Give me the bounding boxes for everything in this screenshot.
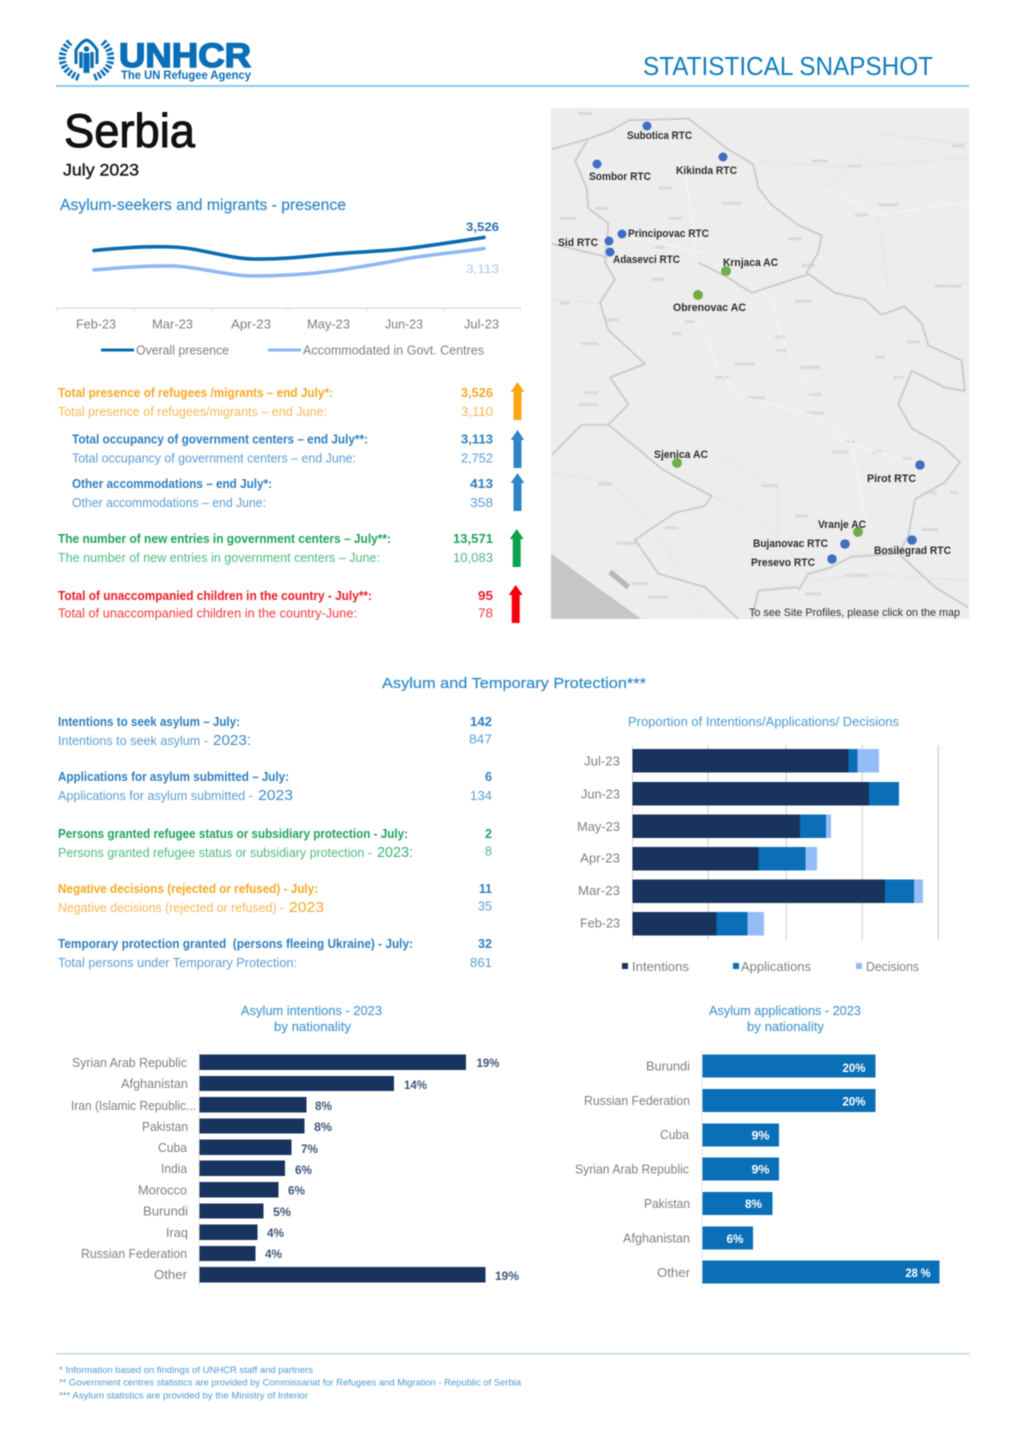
map note: To see Site Profiles, please click on the map xyxy=(749,607,960,619)
category labels: Other xyxy=(154,1268,187,1282)
value labels: 8% xyxy=(314,1120,332,1134)
category labels: Jul-23 xyxy=(584,754,620,768)
axis labels: Jul-23 xyxy=(464,318,499,332)
footnotes xyxy=(59,1365,521,1400)
stats: negative decisions: 11 xyxy=(479,882,492,896)
arrow: red up xyxy=(509,585,523,623)
axis labels: May-23 xyxy=(307,318,350,332)
heading: presence chart: Asylum-seekers and migrants - presence xyxy=(60,197,346,214)
category labels: Iran (Islamic Republic... xyxy=(71,1099,196,1113)
chart title xyxy=(709,1004,861,1034)
stats: intentions: 2023: xyxy=(213,733,251,749)
map labels: Adasevci RTC xyxy=(613,254,680,266)
logo wordmark: UNHCR xyxy=(119,37,251,75)
map labels: Bujanovac RTC xyxy=(753,538,828,550)
chart legend: Accommodated in Govt. Centres xyxy=(303,344,484,358)
stats: government centres: Total occupancy of government centers – end June: xyxy=(72,452,356,466)
stats: unaccompanied children: 95 xyxy=(478,589,493,603)
stats: persons granted protection: Persons granted refugee status or subsidiary protection - xyxy=(58,846,372,860)
bars xyxy=(702,1054,940,1284)
stacked bar chart: proportion of intentions, applications, decisions xyxy=(577,715,939,974)
value labels: 4% xyxy=(265,1247,282,1261)
map pin: Adasevci xyxy=(606,248,614,256)
category labels: India xyxy=(161,1162,187,1176)
value labels: 20% xyxy=(842,1061,866,1075)
map pin: Pirot xyxy=(915,460,925,470)
map labels: Pirot RTC xyxy=(867,473,916,485)
category labels: Iraq xyxy=(166,1226,188,1240)
bars xyxy=(200,1054,486,1282)
map labels: Presevo RTC xyxy=(751,557,815,569)
map pin: Krnjaca xyxy=(721,266,731,276)
value labels: 8% xyxy=(745,1197,762,1211)
stats: unaccompanied children: 78 xyxy=(478,606,493,620)
value labels xyxy=(265,1056,519,1283)
heading: statistical snapshot: STATISTICAL SNAPSHOT xyxy=(643,51,933,81)
stats: other accommodations: Other accommodations – end July*: xyxy=(72,477,272,491)
category labels: Cuba xyxy=(660,1128,689,1142)
value labels: 19% xyxy=(476,1056,500,1070)
map pin: Presevo xyxy=(827,554,837,564)
stats: new entries: The number of new entries in government centers – June: xyxy=(58,551,380,565)
map pin: Kikinda xyxy=(718,152,728,162)
icon: UNHCR emblem xyxy=(62,40,111,78)
heading: asylum and temporary protection: Asylum and Temporary Protection*** xyxy=(382,675,646,692)
stats: persons granted protection xyxy=(58,827,492,861)
stats: intentions: 142 xyxy=(470,715,492,729)
stats: persons granted protection: 8 xyxy=(485,844,492,858)
subtitle: date: July 2023 xyxy=(63,160,139,180)
arrow: blue up xyxy=(511,430,524,468)
bars: Jul-23 xyxy=(632,749,879,772)
stats: government centres: Total occupancy of government centers – end July**: xyxy=(72,432,368,446)
chart title: Proportion of Intentions/Applications/ Decisions xyxy=(628,715,899,729)
stats: intentions: Intentions to seek asylum - xyxy=(58,734,208,748)
category labels: Afghanistan xyxy=(623,1232,690,1246)
map pin: Sid xyxy=(604,236,614,246)
chart title xyxy=(241,1004,382,1034)
logo tagline: The UN Refugee Agency xyxy=(121,70,252,82)
map pin: Subotica xyxy=(642,122,652,130)
category labels: Cuba xyxy=(158,1141,187,1155)
category labels: Mar-23 xyxy=(578,884,620,898)
stats: new entries xyxy=(58,532,493,565)
stats: total presence: Total presence of refugees /migrants – end July*: xyxy=(58,386,333,400)
arrow: blue up xyxy=(511,473,524,511)
stats: persons granted protection: Persons granted refugee status or subsidiary protection - July: xyxy=(58,827,408,841)
stats: other accommodations xyxy=(72,477,493,510)
stats: applications: 2023 xyxy=(258,788,293,804)
map pin: Obrenovac xyxy=(693,290,703,300)
footnotes: ** Government centres statistics are provided by Commissariat for Refugees and Migration - Republic of Serbia xyxy=(59,1378,521,1388)
map labels: Subotica RTC xyxy=(627,130,692,142)
chart legend xyxy=(622,960,919,974)
stats: negative decisions: 35 xyxy=(478,900,492,914)
bar chart: asylum intentions by nationality xyxy=(71,1004,519,1287)
category labels: Burundi xyxy=(143,1204,188,1218)
map pin: Sombor xyxy=(592,160,602,168)
map labels: Sombor RTC xyxy=(589,171,651,183)
category labels: Russian Federation xyxy=(584,1094,690,1108)
data label: accommodated: 3,113 xyxy=(466,262,499,276)
stats: applications: Applications for asylum submitted – July: xyxy=(58,770,289,784)
axis labels: Feb-23 xyxy=(76,318,116,332)
stats: total presence: 3,110 xyxy=(461,405,493,419)
chart title: Asylum intentions - 2023 xyxy=(241,1004,382,1018)
data label: overall: 3,526 xyxy=(466,220,499,234)
stats: other accommodations: Other accommodations – end June: xyxy=(72,496,266,510)
category labels: May-23 xyxy=(577,820,620,834)
bars: May-23 xyxy=(632,814,831,838)
value labels: 6% xyxy=(295,1163,312,1177)
arrow: orange up xyxy=(511,382,524,420)
stats: persons granted protection: 2 xyxy=(485,827,492,841)
stats: government centres: 3,113 xyxy=(461,432,493,446)
value labels: 5% xyxy=(273,1205,291,1219)
category labels: Morocco xyxy=(138,1184,187,1198)
stats: temporary protection xyxy=(58,937,492,970)
stats: negative decisions: Negative decisions (rejected or refused) - xyxy=(58,901,284,915)
category labels xyxy=(577,754,620,930)
category labels: Apr-23 xyxy=(580,852,620,866)
stats: government centres: 2,752 xyxy=(461,452,493,466)
value labels: 9% xyxy=(752,1128,770,1142)
bars: Feb-23 xyxy=(632,912,764,936)
stats: applications: 134 xyxy=(470,789,492,803)
value labels: 20% xyxy=(842,1094,866,1108)
value labels: 4% xyxy=(267,1226,284,1240)
chart legend: Applications xyxy=(741,960,811,974)
chart title: Asylum applications - 2023 xyxy=(709,1004,861,1018)
stats: total presence xyxy=(58,386,493,419)
map pin: Bosilegrad xyxy=(907,535,917,545)
category labels xyxy=(575,1060,690,1280)
map labels: Obrenovac AC xyxy=(673,302,746,314)
stats: negative decisions: 2023 xyxy=(289,900,324,916)
value labels: 28 % xyxy=(906,1266,931,1280)
map labels: Vranje AC xyxy=(818,519,866,531)
stats: other accommodations: 413 xyxy=(470,477,493,491)
chart legend: Decisions xyxy=(866,960,919,974)
map labels: Kikinda RTC xyxy=(676,165,737,177)
category labels: Afghanistan xyxy=(121,1077,188,1091)
title: Serbia: Serbia xyxy=(64,104,196,157)
category labels: Other xyxy=(657,1266,690,1280)
value labels: 6% xyxy=(288,1184,305,1198)
stats: negative decisions xyxy=(58,882,492,916)
category labels: Jun-23 xyxy=(581,788,620,802)
stats: applications: Applications for asylum submitted - xyxy=(58,789,253,803)
line: accommodated xyxy=(94,248,484,276)
stats: unaccompanied children xyxy=(58,589,493,620)
stats: temporary protection: 32 xyxy=(478,937,492,951)
map labels: Principovac RTC xyxy=(628,228,709,240)
map pin: Sjenica xyxy=(672,458,682,468)
axis labels: Apr-23 xyxy=(231,318,271,332)
axis labels: Mar-23 xyxy=(152,318,193,332)
value labels: 19% xyxy=(495,1269,519,1283)
stats: intentions: Intentions to seek asylum – July: xyxy=(58,715,240,729)
footnotes: * Information based on findings of UNHCR staff and partners xyxy=(59,1365,314,1375)
value labels: 7% xyxy=(301,1142,318,1156)
category labels xyxy=(71,1056,196,1282)
category labels: Syrian Arab Republic xyxy=(72,1056,187,1070)
chart legend: Intentions xyxy=(632,960,689,974)
stats: total presence: 3,526 xyxy=(461,386,493,400)
value labels: 9% xyxy=(752,1162,770,1176)
stats: temporary protection: Total persons under Temporary Protection: xyxy=(58,956,297,970)
value labels: 14% xyxy=(404,1078,427,1092)
arrow: green up xyxy=(510,529,524,567)
footnotes: *** Asylum statistics are provided by the Ministry of Interior xyxy=(59,1390,308,1400)
stats: temporary protection: Temporary protection granted (persons fleeing Ukraine) - July: xyxy=(58,937,413,951)
map labels: Sjenica AC xyxy=(654,449,708,461)
category labels: Pakistan xyxy=(142,1120,188,1134)
stats: intentions: 847 xyxy=(469,732,492,746)
map labels: Bosilegrad RTC xyxy=(874,545,951,557)
stats: total presence: Total presence of refugees/migrants – end June: xyxy=(58,405,327,419)
bar chart: asylum applications by nationality xyxy=(575,1004,940,1287)
value labels xyxy=(726,1061,931,1280)
chart title: by nationality xyxy=(747,1020,825,1034)
chart legend: Overall presence xyxy=(136,344,229,358)
line: overall presence xyxy=(94,238,484,259)
stats: other accommodations: 358 xyxy=(470,496,493,510)
stats: applications xyxy=(58,770,492,804)
category labels: Burundi xyxy=(646,1060,690,1074)
axis labels xyxy=(76,318,499,332)
category labels: Russian Federation xyxy=(81,1247,187,1261)
stats: new entries: 10,083 xyxy=(453,551,493,565)
value labels: 6% xyxy=(726,1232,744,1246)
stats: intentions xyxy=(58,715,492,749)
line chart: presence xyxy=(56,220,521,358)
value labels: 8% xyxy=(315,1099,332,1113)
map pin: Principovac xyxy=(618,230,626,238)
stats: unaccompanied children: Total of unaccompanied children in the country - July**: xyxy=(58,589,372,603)
UNHCR logo xyxy=(62,37,252,82)
stats: new entries: The number of new entries in government centers – July**: xyxy=(58,532,391,546)
panel: map of Serbia xyxy=(551,108,969,619)
stats: government centres xyxy=(72,432,493,466)
stats: new entries: 13,571 xyxy=(453,532,493,546)
stats: unaccompanied children: Total of unaccompanied children in the country-June: xyxy=(58,606,357,620)
map pin: Bujanovac xyxy=(840,539,850,549)
map labels xyxy=(558,130,951,569)
chart legend xyxy=(101,344,484,358)
category labels: Feb-23 xyxy=(580,916,620,930)
axis labels: Jun-23 xyxy=(385,318,423,332)
stats: temporary protection: 861 xyxy=(470,956,492,970)
chart title: by nationality xyxy=(274,1020,352,1034)
bars: Mar-23 xyxy=(632,880,923,903)
map pin: Vranje xyxy=(853,527,863,537)
stats: persons granted protection: 2023: xyxy=(377,845,413,861)
map labels: Krnjaca AC xyxy=(723,257,778,269)
map labels: Sid RTC xyxy=(558,237,598,249)
category labels: Syrian Arab Republic xyxy=(575,1162,689,1176)
stats: applications: 6 xyxy=(485,770,492,784)
bars: Apr-23 xyxy=(632,847,817,870)
stats: negative decisions: Negative decisions (rejected or refused) - July: xyxy=(58,882,318,896)
bars: Jun-23 xyxy=(632,782,899,806)
category labels: Pakistan xyxy=(644,1197,690,1211)
